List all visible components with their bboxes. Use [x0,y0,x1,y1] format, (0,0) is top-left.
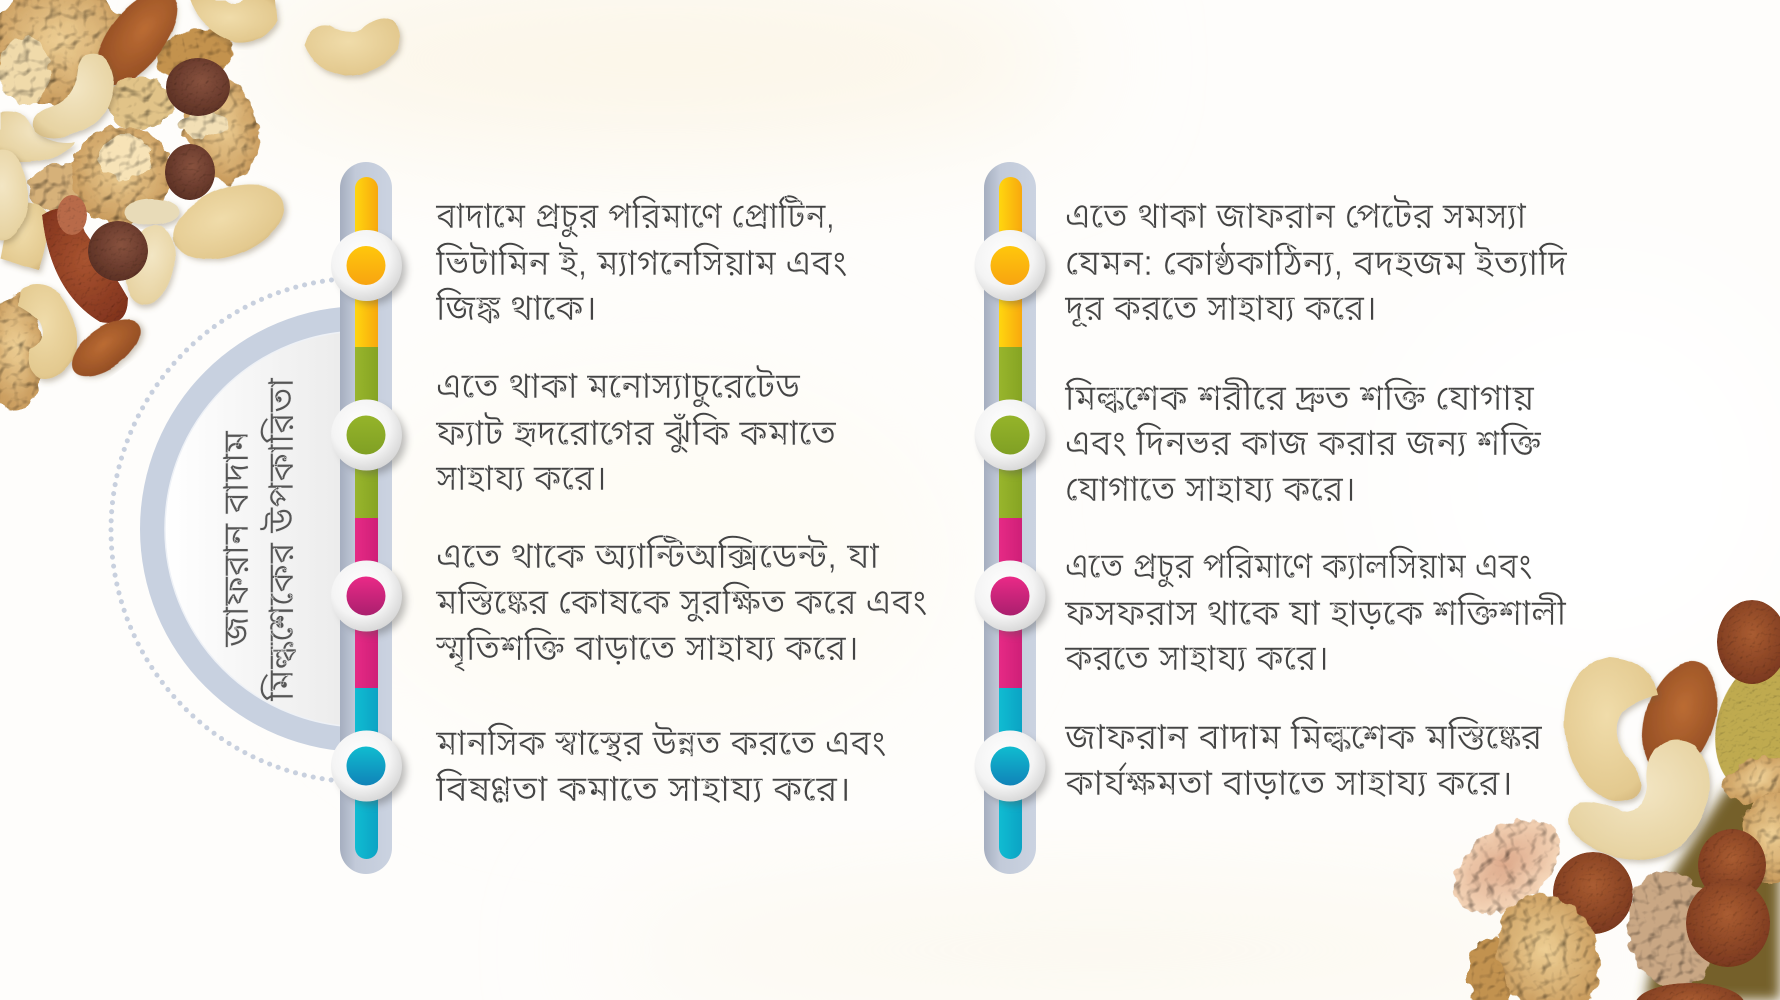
image: mixed nuts bottom right [1436,600,1780,1000]
text: monounsaturated fat: সাহায্য করে। [435,457,607,498]
title [215,378,301,702]
text: monounsaturated fat [435,364,837,498]
text: antioxidants: স্মৃতিশক্তি বাড়াতে সাহায্য করে। [435,626,859,673]
text: antioxidants [435,534,927,673]
text: brain [1064,715,1543,803]
knob: green [331,400,406,474]
knob: pink [974,560,1049,635]
timeline right [974,162,1049,874]
text: brain: জাফরান বাদাম মিল্কশেক মস্তিষ্কের [1064,715,1543,757]
text: antioxidants: এতে থাকে অ্যান্টিঅক্সিডেন্ট, যা [436,534,879,576]
text: digestion [1064,194,1568,328]
knob: blue [974,730,1049,805]
text: bones [1064,544,1566,678]
title: মিল্কশেকের উপকারিতা [259,378,301,702]
image: mixed nuts top left [0,0,295,410]
text: bones: এতে প্রচুর পরিমাণে ক্যালসিয়াম এবং [1065,544,1532,588]
text: mental health [435,721,886,809]
text: protein and minerals: ভিটামিন ই, ম্যাগনেসিয়াম এবং [435,241,847,283]
text: antioxidants: মস্তিষ্কের কোষকে সুরক্ষিত করে এবং [435,580,927,623]
knob: pink [331,560,406,635]
text: monounsaturated fat: ফ্যাট হৃদরোগের ঝুঁকি কমাতে [435,411,837,454]
image: single cashew [305,18,400,76]
knob: green [974,400,1049,474]
inner disc [164,332,340,726]
text: digestion: এতে থাকা জাফরান পেটের সমস্যা [1065,194,1526,236]
text: bones: করতে সাহায্য করে। [1064,637,1329,678]
knob: yellow [974,230,1049,304]
text: digestion: যেমন: কোষ্ঠকাঠিন্য, বদহজম ইত্যাদি [1065,241,1568,283]
timeline left [331,162,406,874]
text: energy: যোগাতে সাহায্য করে। [1065,468,1356,509]
text: energy: এবং দিনভর কাজ করার জন্য শক্তি [1065,421,1542,463]
text: energy [1064,376,1542,509]
semicircle title badge [140,307,340,750]
text: digestion: দূর করতে সাহায্য করে। [1064,287,1377,328]
text: protein and minerals: বাদামে প্রচুর পরিমাণে প্রোটিন, [435,194,835,238]
text: brain: কার্যক্ষমতা বাড়াতে সাহায্য করে। [1064,761,1513,803]
text: protein and minerals: জিঙ্ক থাকে। [435,286,597,328]
text: mental health: বিষণ্ণতা কমাতে সাহায্য করে। [435,767,851,809]
text: mental health: মানসিক স্বাস্থের উন্নত করতে এবং [435,721,886,763]
knob: blue [331,730,406,805]
title: জাফরান বাদাম [215,430,256,648]
outer ring [140,307,340,750]
dotted arc [108,278,334,782]
text: energy: মিল্কশেক শরীরে দ্রুত শক্তি যোগায় [1064,376,1534,418]
text: protein and minerals [435,194,847,328]
text: bones: ফসফরাস থাকে যা হাড়কে শক্তিশালী [1064,591,1566,633]
knob: yellow [331,230,406,304]
text: monounsaturated fat: এতে থাকা মনোস্যাচুরেটেড [436,364,800,408]
